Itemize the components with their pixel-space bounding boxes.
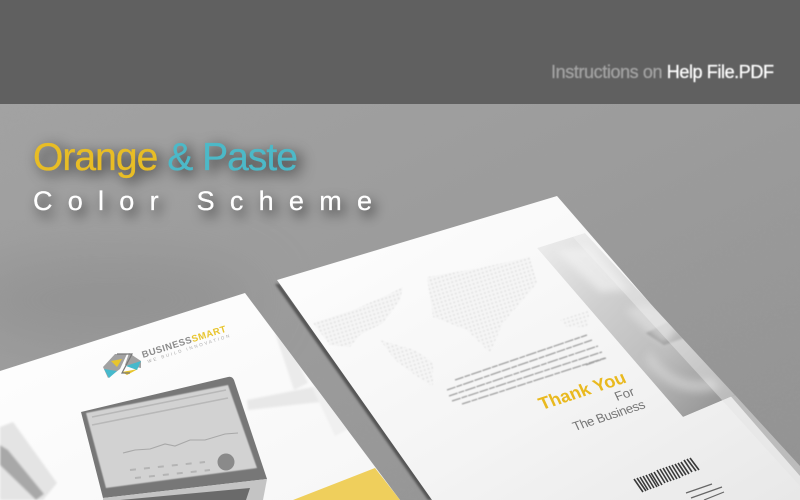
For label: For bbox=[612, 384, 637, 404]
brochure: back cover bbox=[275, 196, 800, 500]
header text: instructions: Instructions on Help File.PDF bbox=[551, 62, 774, 82]
body text block bbox=[447, 335, 606, 404]
pie chart bbox=[218, 454, 234, 470]
page sheet bbox=[277, 196, 800, 500]
laptop bbox=[81, 377, 267, 500]
contact text bbox=[686, 484, 724, 500]
barcode bbox=[634, 458, 699, 492]
logo text: BUSINESS SMART: BUSINESSSMART bbox=[141, 324, 228, 361]
photo band bbox=[537, 233, 735, 417]
concrete background bbox=[0, 104, 800, 500]
laptop screen bbox=[86, 385, 257, 488]
header band bbox=[0, 0, 800, 104]
laptop base bbox=[103, 479, 267, 500]
logo bbox=[103, 353, 141, 378]
brochure: front cover bbox=[0, 293, 400, 500]
page sheet bbox=[0, 293, 400, 500]
faded desk photo bbox=[0, 333, 350, 500]
heading: Orange & Paste: Orange & Paste bbox=[33, 136, 298, 179]
logo tagline: WE BUILD INNOVATION bbox=[147, 333, 230, 364]
subheading: Color Scheme: Color Scheme bbox=[33, 186, 372, 216]
edge strip bbox=[722, 395, 800, 486]
dotted world map bbox=[313, 257, 590, 387]
The Business label: The Business bbox=[570, 397, 648, 434]
chart line bbox=[123, 433, 238, 453]
Thank You heading: Thank You bbox=[535, 368, 629, 414]
page shadow bbox=[275, 284, 440, 500]
laptop lid bbox=[81, 377, 267, 498]
yellow accent panel bbox=[293, 468, 400, 500]
